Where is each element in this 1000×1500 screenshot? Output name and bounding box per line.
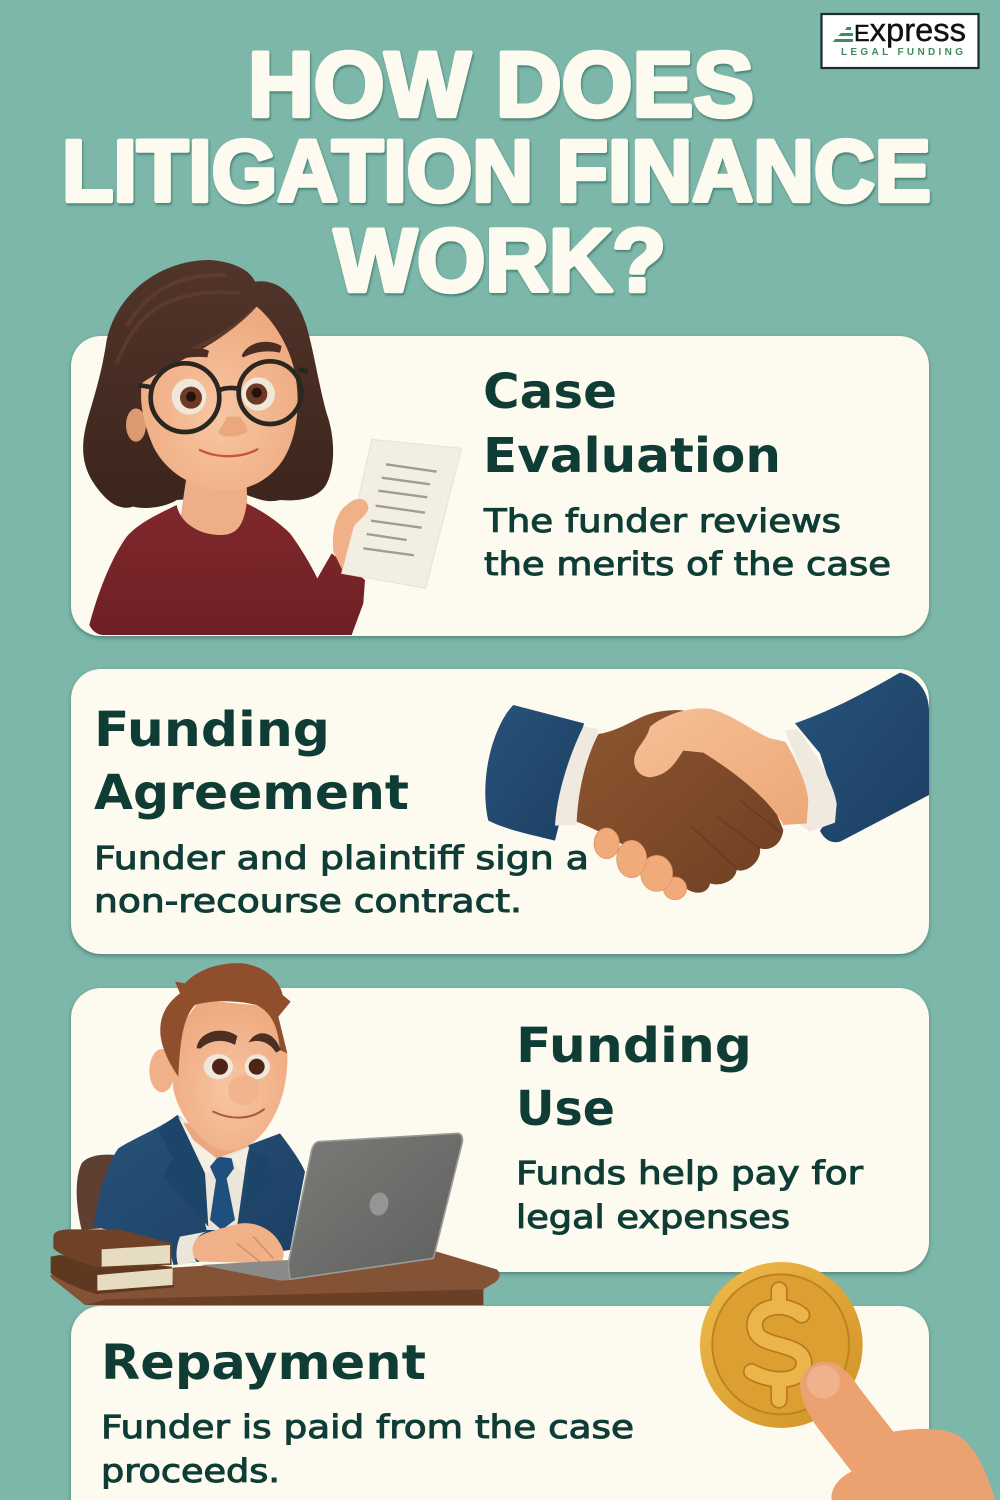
brown hand bbox=[577, 710, 783, 893]
card 4 background bbox=[71, 1306, 929, 1500]
heading: case evaluation: Evaluation bbox=[483, 428, 781, 484]
upper book bbox=[53, 1229, 172, 1267]
heading: funding agreement bbox=[94, 702, 409, 821]
title: LITIGATION FINANCE bbox=[62, 123, 931, 220]
light hand bbox=[634, 708, 808, 825]
body text: repayment: Funder is paid from the case bbox=[101, 1408, 634, 1446]
right eye bbox=[245, 1054, 270, 1079]
heading: funding use: Use bbox=[516, 1081, 615, 1137]
body text: funding agreement: non-recourse contract. bbox=[94, 882, 522, 920]
panel: funding agreement bbox=[71, 669, 929, 954]
sweater bbox=[89, 503, 365, 635]
nose bbox=[228, 1075, 260, 1105]
jacket bbox=[93, 1115, 305, 1265]
neck bbox=[177, 480, 248, 543]
heading: case evaluation bbox=[483, 364, 781, 484]
body text: funding agreement bbox=[94, 839, 589, 920]
card 1 background bbox=[71, 336, 929, 636]
heading: repayment: Repayment bbox=[101, 1335, 426, 1391]
logo: Express Legal Funding bbox=[822, 12, 978, 68]
smile bbox=[213, 1109, 264, 1118]
brows bbox=[173, 348, 209, 361]
logo: Express Legal Funding: LEGAL FUNDING bbox=[841, 47, 963, 58]
panel: funding use bbox=[71, 988, 929, 1272]
right eye bbox=[242, 377, 275, 411]
body text: funding use: legal expenses bbox=[516, 1198, 790, 1236]
desk front bbox=[85, 1289, 483, 1305]
mouth bbox=[200, 449, 257, 456]
glasses bbox=[138, 361, 308, 432]
left eye bbox=[204, 1054, 233, 1079]
panel: repayment bbox=[71, 1306, 929, 1500]
desk bbox=[50, 1252, 500, 1305]
body text: case evaluation: the merits of the case bbox=[484, 545, 891, 583]
paper lines bbox=[363, 464, 437, 555]
brows bbox=[197, 1031, 237, 1048]
laptop logo bbox=[367, 1191, 391, 1217]
body text: funding use: Funds help pay for bbox=[516, 1154, 864, 1192]
heading: funding agreement: Funding bbox=[94, 702, 330, 758]
fingernail bbox=[807, 1365, 840, 1398]
illustration: hand touching gold coin bbox=[700, 1262, 995, 1500]
heading: funding use: Funding bbox=[516, 1018, 752, 1074]
heading: funding use bbox=[516, 1018, 752, 1137]
heading: funding agreement: Agreement bbox=[94, 765, 409, 821]
heading: case evaluation: Case bbox=[483, 364, 617, 420]
body text: funding use bbox=[516, 1154, 864, 1236]
card 3 background bbox=[71, 988, 929, 1272]
shirt cuff bbox=[177, 1232, 207, 1265]
logo: Express Legal Funding: Express bbox=[854, 12, 966, 48]
illustration: handshake bbox=[485, 673, 929, 900]
body text: funding agreement: Funder and plaintiff sign a bbox=[94, 839, 589, 877]
hair bbox=[83, 260, 333, 508]
tie bbox=[210, 1157, 235, 1230]
nose bbox=[219, 417, 247, 436]
right shirt cuff bbox=[785, 729, 837, 832]
hair strands bbox=[117, 275, 255, 363]
fingers bbox=[594, 828, 687, 900]
illustration: businessman at laptop bbox=[50, 963, 500, 1305]
body text: case evaluation bbox=[483, 502, 891, 583]
finger creases bbox=[692, 800, 782, 868]
body text: repayment bbox=[101, 1408, 634, 1490]
ear bbox=[149, 1049, 175, 1092]
ear bbox=[126, 408, 146, 442]
laptop base bbox=[201, 1260, 292, 1281]
left eye bbox=[172, 379, 206, 415]
lower book bbox=[51, 1255, 174, 1294]
body text: repayment: proceeds. bbox=[101, 1452, 280, 1490]
card 2 background bbox=[71, 669, 929, 954]
thumb and hand bbox=[333, 499, 368, 570]
hand bbox=[190, 1223, 284, 1263]
hair bbox=[160, 963, 291, 1077]
panel: case evaluation bbox=[71, 260, 929, 636]
left sleeve bbox=[485, 705, 584, 841]
right sleeve bbox=[795, 673, 929, 842]
finger creases bbox=[237, 1237, 273, 1262]
title bbox=[62, 34, 931, 310]
face bbox=[141, 307, 298, 491]
shirt bbox=[178, 1117, 248, 1230]
laptop screen bbox=[288, 1133, 462, 1279]
left shirt cuff bbox=[555, 727, 598, 826]
paper bbox=[342, 439, 462, 588]
face bbox=[173, 1000, 287, 1151]
chair bbox=[77, 1155, 115, 1230]
coin bbox=[700, 1262, 863, 1428]
coin inner ring bbox=[712, 1274, 849, 1414]
title: WORK? bbox=[334, 210, 666, 310]
lapels bbox=[158, 1115, 273, 1227]
illustration: woman with glasses holding document bbox=[83, 260, 462, 635]
body text: case evaluation: The funder reviews bbox=[483, 502, 841, 540]
finger bbox=[800, 1362, 995, 1500]
neck bbox=[183, 1123, 253, 1158]
shirt collar bbox=[178, 1117, 249, 1175]
title: HOW DOES bbox=[248, 34, 754, 136]
dollar sign bbox=[752, 1290, 804, 1400]
